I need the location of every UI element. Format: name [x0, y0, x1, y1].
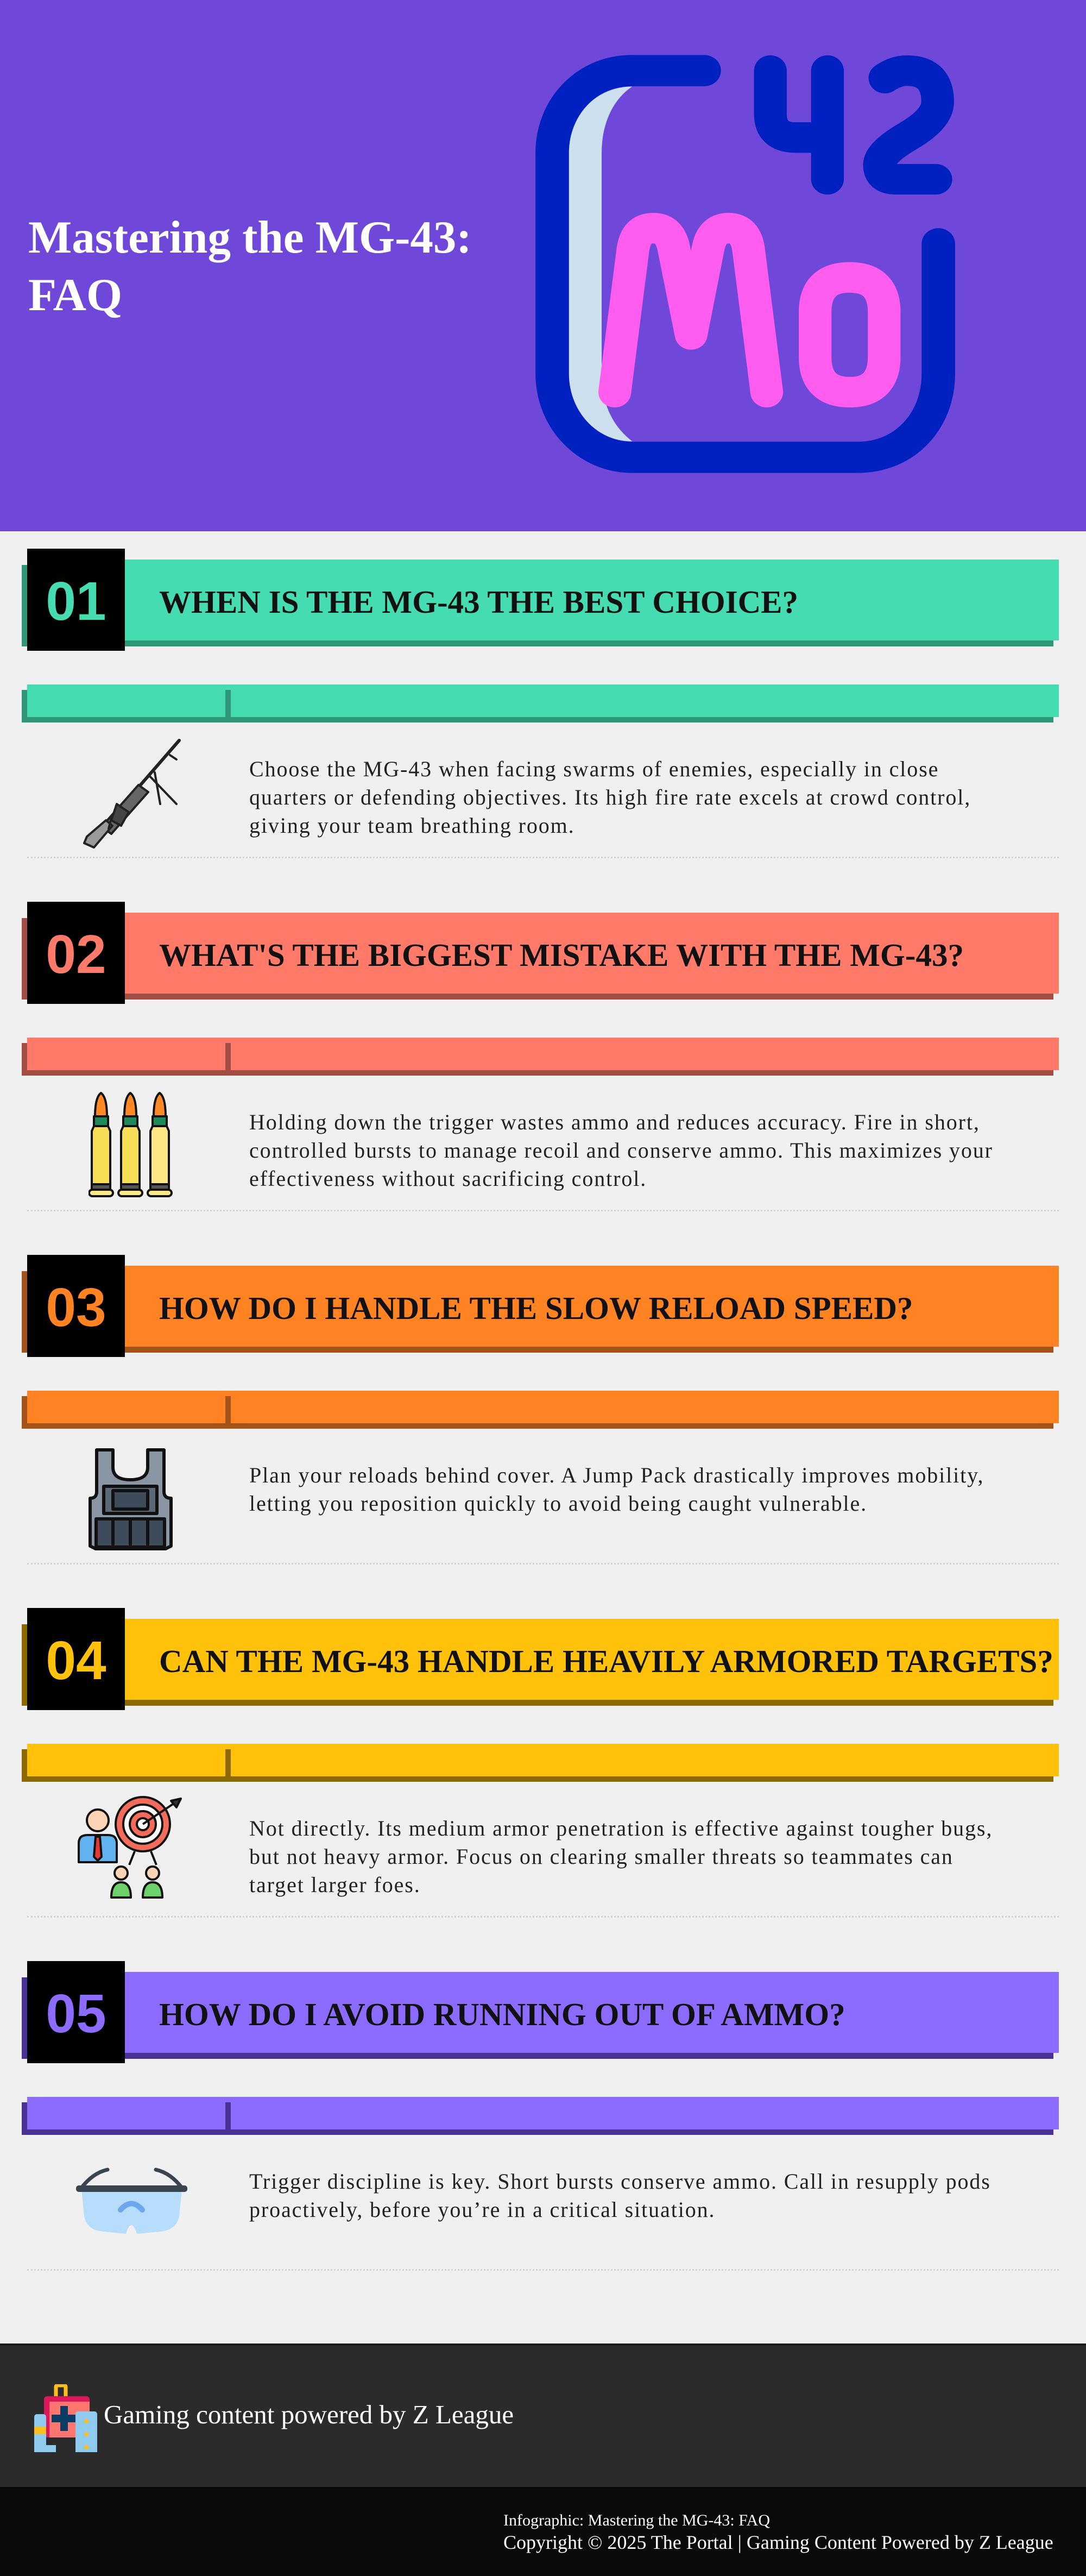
- heading 02: WHAT'S THE BIGGEST MISTAKE WITH THE MG-43?: [159, 937, 964, 973]
- text 03: [249, 1463, 984, 1516]
- icon: safety goggles: [76, 2167, 187, 2234]
- text 04: but not heavy armor. Focus on clearing smaller threats so teammates can: [249, 1844, 954, 1869]
- panel: section 03: [22, 1255, 1059, 1565]
- icon: target with team: [78, 1796, 182, 1899]
- number badge 05: [27, 1961, 125, 2063]
- title: Mastering the MG-43:: [28, 212, 472, 263]
- text 01: quarters or defending objectives. Its high fire rate excels at crowd control,: [249, 785, 971, 809]
- text 02: [249, 1110, 993, 1191]
- icon: bullets: [89, 1092, 173, 1197]
- icon: machine gun: [83, 739, 181, 849]
- footer: brand band: [0, 2343, 1086, 2487]
- text 03: Plan your reloads behind cover. A Jump Pack drastically improves mobility,: [249, 1463, 984, 1487]
- text 02: controlled bursts to manage recoil and conserve ammo. This maximizes your: [249, 1138, 993, 1163]
- heading 04: CAN THE MG-43 HANDLE HEAVILY ARMORED TARGETS?: [159, 1643, 1053, 1679]
- icon: medkit: [34, 2384, 97, 2452]
- text 04: [249, 1816, 993, 1897]
- text 05: proactively, before you’re in a critical situation.: [249, 2197, 715, 2222]
- heading 01: WHEN IS THE MG-43 THE BEST CHOICE?: [159, 584, 798, 620]
- text 01: giving your team breathing room.: [249, 813, 575, 838]
- heading 03: HOW DO I HANDLE THE SLOW RELOAD SPEED?: [159, 1290, 913, 1326]
- footer: copyright band: [0, 2487, 1086, 2576]
- number badge 02: [27, 902, 125, 1004]
- panel: section 02: [22, 902, 1059, 1211]
- icon: armor vest: [89, 1448, 173, 1550]
- number badge 05: 05: [46, 1983, 106, 2044]
- header: [0, 0, 1086, 531]
- text 02: Holding down the trigger wastes ammo and reduces accuracy. Fire in short,: [249, 1110, 980, 1134]
- footer brand text: Gaming content powered by Z League: [104, 2399, 514, 2429]
- text 01: [249, 757, 971, 838]
- text 04: target larger foes.: [249, 1873, 421, 1897]
- number badge 02: 02: [46, 924, 106, 985]
- icon: molybdenum element tile: [535, 55, 955, 473]
- copyright line: Copyright © 2025 The Portal | Gaming Content Powered by Z League: [503, 2531, 1053, 2553]
- number badge 04: [27, 1608, 125, 1710]
- text 03: letting you reposition quickly to avoid being caught vulnerable.: [249, 1491, 867, 1516]
- text 05: [249, 2169, 991, 2222]
- panel: section 05: [22, 1961, 1059, 2271]
- text 01: Choose the MG-43 when facing swarms of enemies, especially in close: [249, 757, 939, 781]
- panel: section 01: [22, 549, 1059, 858]
- heading 05: HOW DO I AVOID RUNNING OUT OF AMMO?: [159, 1996, 845, 2032]
- panel: section 04: [22, 1608, 1059, 1918]
- number badge 03: 03: [46, 1277, 106, 1338]
- number badge 04: 04: [46, 1630, 106, 1691]
- number badge 01: 01: [46, 571, 106, 632]
- text 05: Trigger discipline is key. Short bursts conserve ammo. Call in resupply pods: [249, 2169, 991, 2194]
- text 02: effectiveness without sacrificing control.: [249, 1166, 647, 1191]
- text 04: Not directly. Its medium armor penetration is effective against tougher bugs,: [249, 1816, 993, 1840]
- title: FAQ: [28, 269, 122, 321]
- number badge 03: [27, 1255, 125, 1357]
- credit line: Infographic: Mastering the MG-43: FAQ: [503, 2511, 770, 2529]
- title: [28, 212, 472, 321]
- number badge 01: [27, 549, 125, 651]
